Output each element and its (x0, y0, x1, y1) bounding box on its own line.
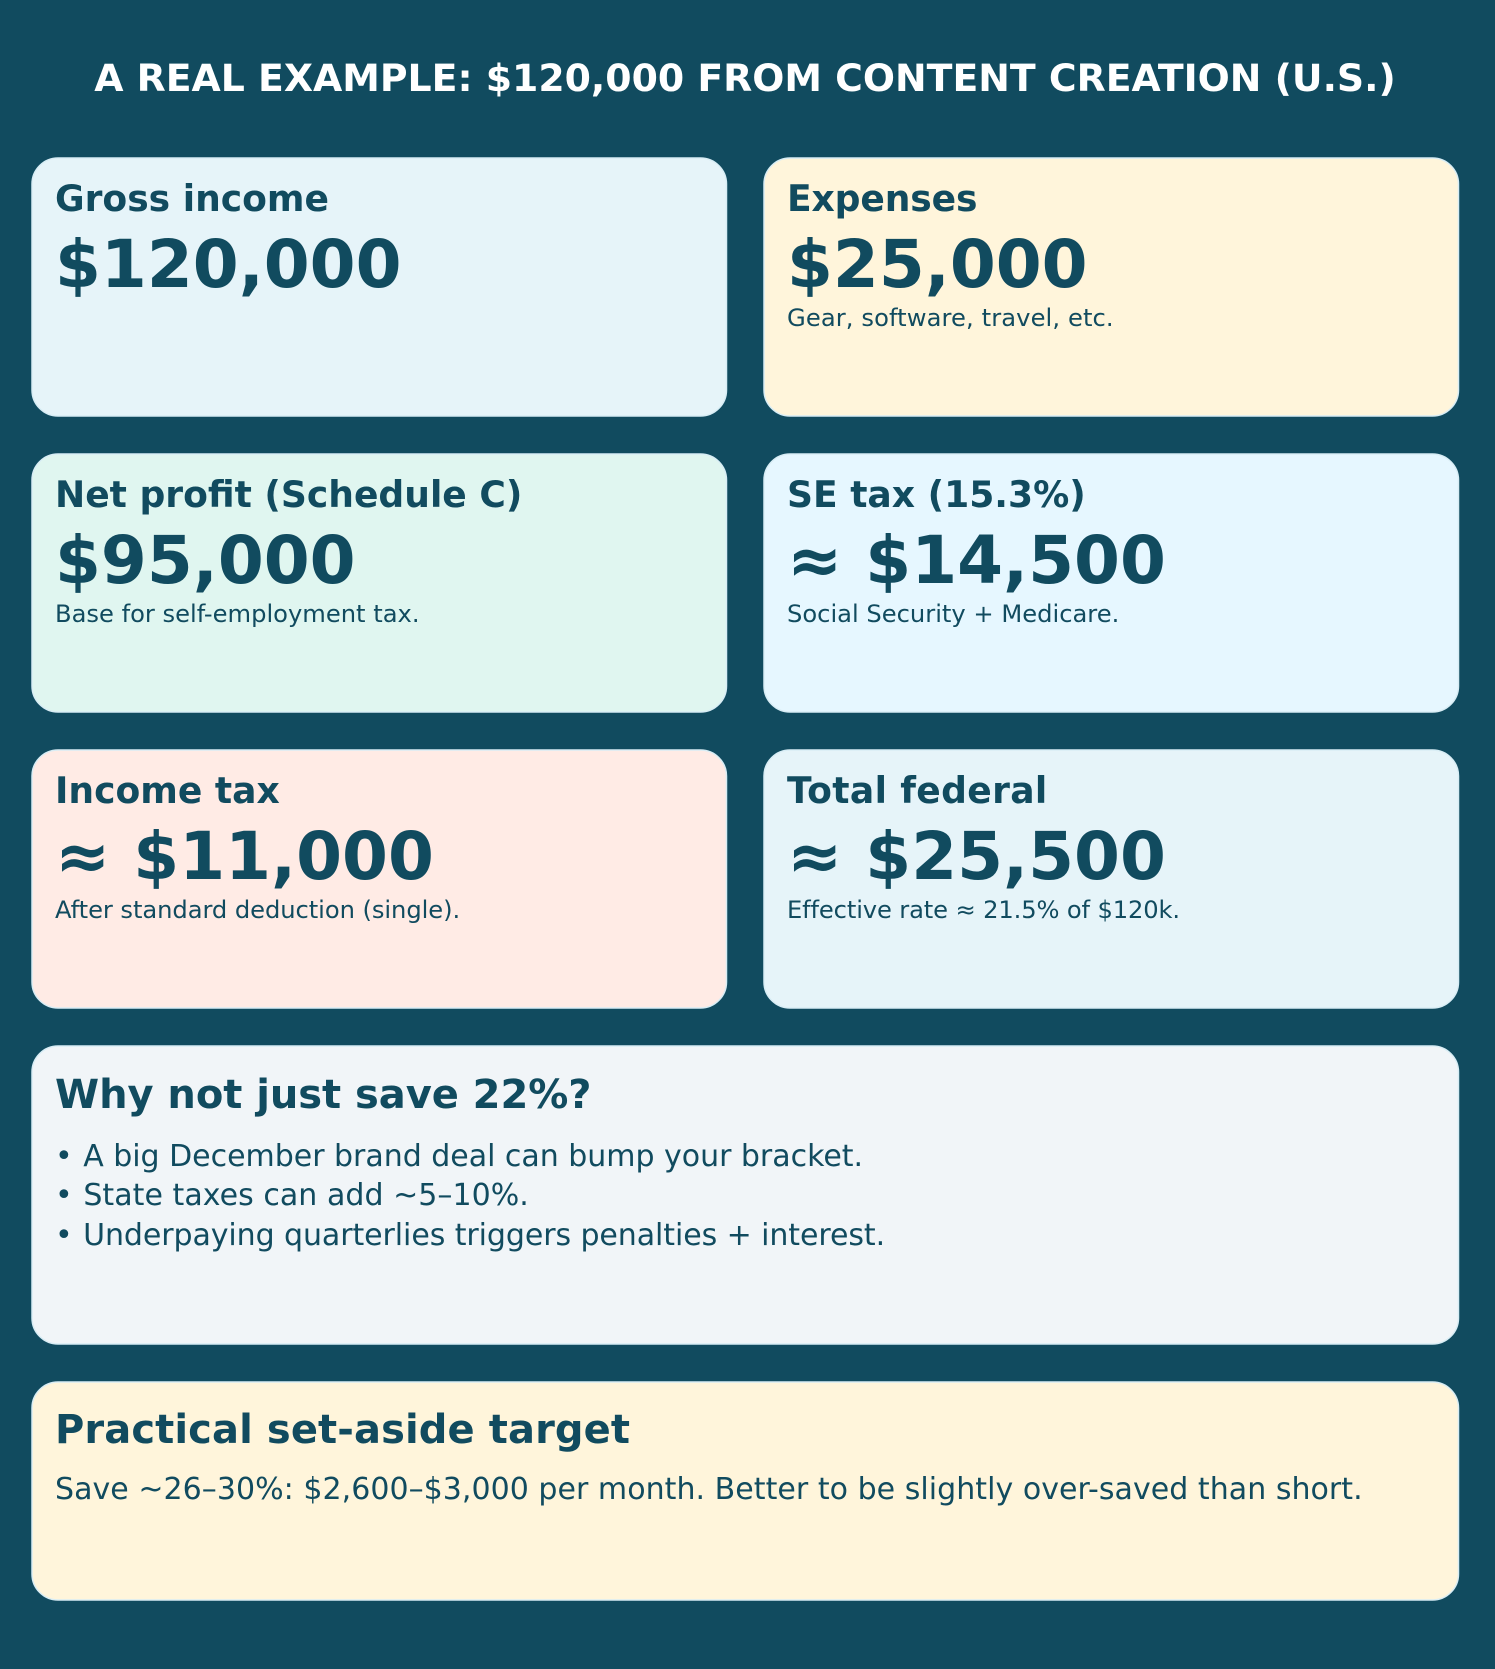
value: expenses: $25,000 (787, 226, 1088, 303)
label: total federal: Total federal (787, 770, 1048, 812)
value: gross income: $120,000 (55, 226, 402, 303)
value: net profit: $95,000 (55, 522, 356, 599)
label: expenses: Expenses (787, 178, 977, 220)
panel: income tax (32, 750, 726, 1008)
note: SE tax: Social Security + Medicare. (787, 600, 1119, 628)
label: income tax: Income tax (55, 770, 280, 812)
panel: net profit (32, 454, 726, 712)
note: income tax: After standard deduction (single). (55, 896, 460, 924)
panel: total federal (764, 750, 1458, 1008)
bullet list: • State taxes can add ~5–10%. (55, 1178, 529, 1213)
heading: why not just save 22%: Why not just save 22%? (55, 1072, 591, 1118)
bullet list: • Underpaying quarterlies triggers penalties + interest. (55, 1218, 885, 1253)
label: SE tax: SE tax (15.3%) (787, 474, 1086, 516)
panel: practical set-aside target (32, 1382, 1458, 1600)
heading: practical set-aside target: Practical set-aside target (55, 1407, 630, 1453)
bullet list: • A big December brand deal can bump your bracket. (55, 1139, 863, 1174)
bullet list (55, 1139, 885, 1253)
value: total federal: ≈ $25,500 (787, 818, 1166, 895)
panel: SE tax (764, 454, 1458, 712)
label: gross income: Gross income (55, 178, 329, 220)
note: net profit: Base for self-employment tax. (55, 600, 420, 628)
label: net profit: Net profit (Schedule C) (55, 474, 522, 516)
value: income tax: ≈ $11,000 (55, 818, 434, 895)
value: SE tax: ≈ $14,500 (787, 522, 1166, 599)
panel: gross income (32, 158, 726, 416)
note: expenses: Gear, software, travel, etc. (787, 304, 1114, 332)
title: A REAL EXAMPLE: $120,000 FROM CONTENT CREATION (U.S.) (94, 56, 1396, 100)
body: practical set-aside target: Save ~26–30%: $2,600–$3,000 per month. Better to be slightly over-saved than short. (55, 1472, 1363, 1507)
panel: why not just save 22% (32, 1046, 1458, 1344)
panel: expenses (764, 158, 1458, 416)
note: total federal: Effective rate ≈ 21.5% of $120k. (787, 896, 1180, 924)
